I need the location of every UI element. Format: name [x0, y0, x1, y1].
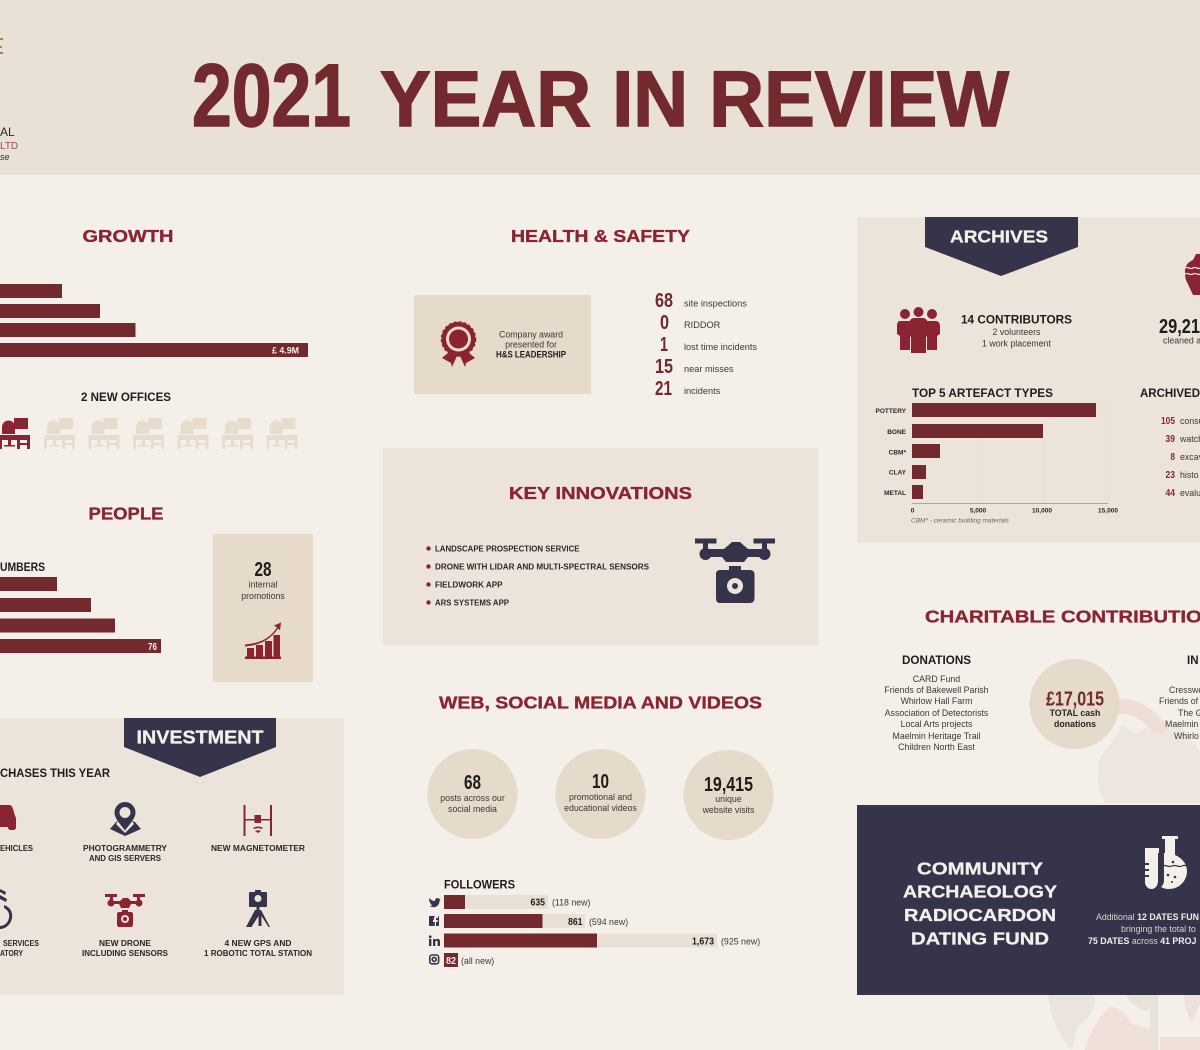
- bar chart: artefact types: METAL: [884, 490, 906, 497]
- bar chart: artefact types: [876, 403, 1118, 524]
- bullet list: [426, 544, 650, 608]
- stats list: 15: [655, 356, 673, 378]
- list: archived types: 44: [1166, 488, 1175, 499]
- label: gps: 4 NEW GPS AND: [224, 939, 292, 948]
- text: fund statistics: 75 DATES across 41 PROJ: [1088, 936, 1196, 946]
- logo fragment: se: [0, 152, 10, 162]
- panel: web, social media and videos: [428, 692, 774, 967]
- stat circle: posts: 68: [464, 772, 481, 794]
- label: gis servers: AND GIS SERVERS: [89, 854, 162, 863]
- bar chart: artefact types: BONE: [887, 429, 907, 436]
- panel: health and safety: [414, 226, 757, 400]
- text: contributors: 1 work placement: [982, 338, 1052, 348]
- stat circle: cash donations: £17,015: [1046, 688, 1104, 710]
- ribbon: archives: [925, 217, 1078, 276]
- stat circle: videos: [556, 749, 646, 839]
- title: YEAR IN REVIEW: [380, 54, 1009, 143]
- heading: key innovations: KEY INNOVATIONS: [509, 483, 692, 503]
- list: donations: Children North East: [898, 742, 975, 752]
- bar chart: turnover: [0, 284, 308, 357]
- icon: microscope: [0, 889, 12, 929]
- bullet list: FIELDWORK APP: [435, 580, 503, 590]
- subheading: top 5 artefact types: TOP 5 ARTEFACT TYPES: [912, 388, 1053, 400]
- list: donations: Local Arts projects: [901, 719, 973, 729]
- callout: internal promotions: [213, 534, 313, 682]
- bar chart: turnover: £ 4.9M: [272, 346, 299, 356]
- stat circle: website visits: [684, 750, 774, 840]
- icon: test tube and flask: [1145, 836, 1188, 889]
- callout: award: presented for: [505, 340, 557, 350]
- heading: fund title: ARCHAEOLOGY: [903, 882, 1057, 902]
- text: contributors: [961, 312, 1072, 348]
- panel: people: [0, 504, 313, 682]
- list: donations: Association of Detectorists: [885, 708, 989, 718]
- icon: contributors: [897, 307, 940, 353]
- icon: rising chart: [245, 622, 281, 659]
- title: 2021: [192, 45, 351, 145]
- subheading: purchases: CHASES THIS YEAR: [0, 768, 111, 780]
- label: vehicles: EHICLES: [0, 844, 34, 853]
- text: fund statistics: bringing the total to: [1121, 924, 1196, 934]
- logo fragment: [0, 38, 18, 162]
- ribbon: investment: INVESTMENT: [136, 728, 264, 748]
- icon: drone with camera: [105, 894, 145, 927]
- label: photogrammetry: PHOTOGRAMMETRY: [83, 844, 168, 853]
- label: magnetometer: NEW MAGNETOMETER: [211, 844, 305, 853]
- bar chart: followers: 82: [446, 956, 456, 967]
- subheading: numbers: UMBERS: [0, 562, 45, 574]
- subheading: archived: ARCHIVED: [1140, 388, 1200, 400]
- panel: key innovations: [383, 448, 818, 645]
- icon: map pin: [110, 802, 141, 836]
- subheading: offices: 2 NEW OFFICES: [81, 392, 171, 404]
- icon: vase: [1185, 254, 1200, 295]
- stat circle: cash donations: TOTAL cash: [1050, 708, 1100, 718]
- stat circle: posts: [428, 749, 518, 839]
- bar chart: artefact types: CLAY: [889, 470, 907, 476]
- stats list: 0: [660, 312, 669, 334]
- subheading: in kind: IN: [1187, 655, 1198, 667]
- stats list: [655, 290, 757, 400]
- heading: web: WEB, SOCIAL MEDIA AND VIDEOS: [439, 692, 762, 712]
- title: [192, 45, 1009, 145]
- list: in kind: [1159, 685, 1200, 741]
- panel: investment: [0, 718, 344, 995]
- stat circle: cash donations: donations: [1054, 719, 1096, 729]
- stats list: 68: [655, 290, 673, 312]
- stat circle: videos: promotional and: [569, 792, 632, 802]
- icon: total station on tripod: [246, 890, 270, 927]
- label: new drone: NEW DRONE: [99, 939, 152, 948]
- bar chart: artefact types: 5,000: [970, 508, 987, 514]
- text: fund statistics: Additional 12 DATES FUN: [1096, 912, 1199, 922]
- bar chart: followers: (all new): [461, 956, 494, 966]
- bar chart: artefact types: POTTERY: [876, 408, 907, 415]
- list: archived types: 39: [1166, 434, 1175, 445]
- stats list: 1: [660, 334, 668, 356]
- text: contributors: 2 volunteers: [993, 327, 1041, 337]
- icon: rosette: [442, 322, 476, 367]
- bar chart: followers: 1,673: [692, 936, 714, 948]
- decorative leaf watermark: [1048, 706, 1200, 1050]
- icon: linkedin: [429, 935, 440, 946]
- list: in kind: Friends of: [1159, 696, 1199, 706]
- list: in kind: Whirlo: [1174, 731, 1199, 741]
- icon: instagram: [430, 955, 439, 964]
- icon: vehicle: [0, 805, 16, 830]
- stats list: near misses: [684, 364, 734, 374]
- bar chart: artefact types: 15,000: [1098, 508, 1118, 514]
- bar chart: artefact types: 10,000: [1032, 508, 1052, 514]
- list: donations: Maelmin Heritage Trail: [892, 731, 981, 741]
- logo fragment: LTD: [0, 141, 18, 152]
- bar chart: artefact types: CBM*: [889, 450, 906, 456]
- bar chart: staff numbers: 76: [148, 642, 157, 653]
- label: laboratory: ATORY: [0, 949, 24, 958]
- stat circle: videos: 10: [592, 771, 609, 793]
- ribbon: investment: [124, 718, 276, 777]
- stat circle: website visits: website visits: [702, 805, 755, 815]
- heading: growth: GROWTH: [82, 226, 174, 246]
- bar chart: followers: 861: [568, 917, 583, 928]
- stats list: incidents: [684, 386, 721, 396]
- heading: people: PEOPLE: [88, 504, 164, 524]
- stat circle: website visits: unique: [715, 794, 742, 804]
- list: archived types: 8: [1170, 452, 1175, 463]
- label: including sensors: INCLUDING SENSORS: [82, 949, 169, 958]
- header band: [0, 0, 1200, 175]
- callout: internal promotions: 28: [254, 559, 272, 581]
- stat circle: posts: posts across our: [440, 793, 505, 803]
- callout: internal promotions: promotions: [241, 591, 285, 601]
- bar chart: artefact types: 0: [911, 508, 915, 514]
- heading: health and safety: HEALTH & SAFETY: [511, 226, 690, 246]
- label: services: SERVICES: [3, 939, 40, 948]
- stats list: lost time incidents: [684, 342, 757, 352]
- label: total station: 1 ROBOTIC TOTAL STATION: [204, 949, 312, 958]
- callout: internal promotions: internal: [249, 580, 277, 590]
- heading: fund title: DATING FUND: [911, 928, 1049, 948]
- icons: office pictogram row: [0, 418, 298, 449]
- heading: fund title: COMMUNITY: [917, 858, 1043, 878]
- stat circle: videos: educational videos: [564, 803, 638, 813]
- logo fragment: AL: [0, 125, 15, 139]
- bar chart: followers: (118 new): [552, 898, 591, 908]
- bar chart: followers: 635: [530, 898, 545, 908]
- panel: charitable contributions: [884, 606, 1200, 752]
- list: archived types: 23: [1166, 470, 1175, 481]
- heading: fund title: [903, 858, 1057, 948]
- list: archived types: histo: [1180, 470, 1199, 480]
- bar chart: followers: [444, 895, 760, 967]
- subheading: followers: FOLLOWERS: [444, 880, 515, 892]
- stat circle: cash donations: [1030, 659, 1120, 749]
- list: donations: [884, 674, 989, 752]
- bullet list: DRONE WITH LIDAR AND MULTI-SPECTRAL SENSORS: [435, 562, 650, 572]
- list: donations: Friends of Bakewell Parish: [884, 685, 989, 695]
- callout: award: Company award: [499, 330, 563, 340]
- stat circle: posts: social media: [448, 804, 497, 814]
- callout: award: H&S LEADERSHIP: [496, 350, 566, 360]
- bullet list: ARS SYSTEMS APP: [435, 598, 510, 608]
- bullet list: LANDSCAPE PROSPECTION SERVICE: [435, 544, 580, 554]
- stats list: site inspections: [684, 298, 747, 308]
- subheading: donations: DONATIONS: [902, 655, 971, 667]
- stat circle: website visits: 19,415: [704, 774, 753, 796]
- icon: drone: [695, 538, 775, 603]
- bar chart: staff numbers: [0, 577, 161, 653]
- ribbon: archives: ARCHIVES: [950, 226, 1048, 246]
- panel: growth: [0, 226, 308, 449]
- list: archived types: [1161, 416, 1200, 499]
- list: in kind: Maelmin: [1165, 719, 1198, 729]
- callout: award: [414, 295, 591, 394]
- heading: charitable contributions: CHARITABLE CONTRIBUTIONS: [925, 606, 1200, 626]
- icon: twitter: [429, 898, 440, 907]
- icon: facebook: [429, 916, 439, 926]
- bar chart: artefact types: CBM* - ceramic building materials: [911, 518, 1010, 524]
- list: donations: Whirlow Hall Farm: [901, 696, 972, 706]
- icon: magnetometer: [244, 805, 272, 836]
- bar chart: followers: (594 new): [589, 917, 628, 927]
- stats list: RIDDOR: [684, 320, 721, 330]
- panel: radiocarbon dating fund: [857, 805, 1200, 995]
- list: archived types: 105: [1161, 416, 1175, 427]
- heading: fund title: RADIOCARDON: [904, 905, 1056, 925]
- stats list: 21: [655, 378, 672, 400]
- list: donations: CARD Fund: [913, 674, 960, 684]
- bar chart: followers: (925 new): [721, 936, 760, 946]
- panel: archives: [857, 217, 1200, 543]
- text: fund statistics: [1088, 912, 1199, 946]
- text: contributors: 14 CONTRIBUTORS: [961, 312, 1072, 326]
